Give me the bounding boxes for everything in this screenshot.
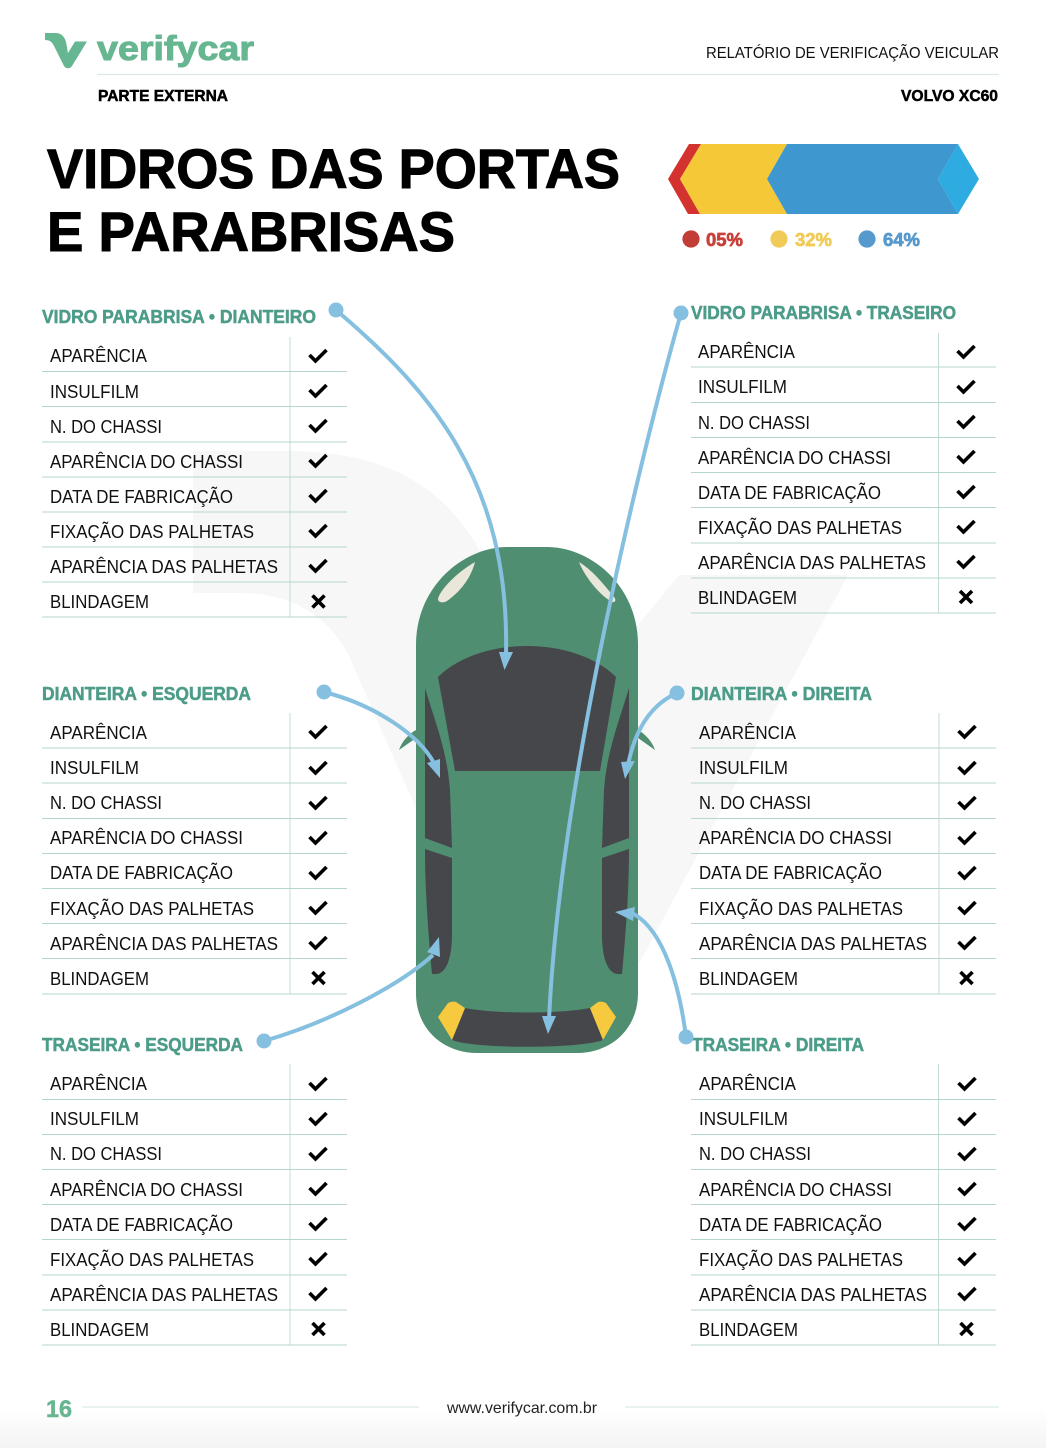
checklist rows: FIXAÇÃO DAS PALHETAS (699, 898, 903, 919)
checklist rows: N. DO CHASSI (50, 1144, 162, 1164)
logo wordmark: verifycar (97, 30, 254, 68)
checklist rows: N. DO CHASSI (699, 1144, 811, 1164)
arrow: windshield rear (542, 306, 688, 1034)
heading: DIANTEIRA • ESQUERDA (42, 684, 251, 704)
checklist rows: APARÊNCIA (50, 346, 147, 366)
heading: TRASEIRA • DIREITA (692, 1035, 864, 1055)
footer (46, 1396, 999, 1423)
checklist rows: N. DO CHASSI (50, 417, 162, 437)
checklist rows: APARÊNCIA DAS PALHETAS (50, 1285, 278, 1305)
title: VIDROS DAS PORTAS (47, 137, 620, 200)
arrow: rear left (256, 937, 440, 1048)
checklist rows: BLINDAGEM (699, 969, 798, 989)
header report label: RELATÓRIO DE VERIFICAÇÃO VEICULAR (706, 42, 999, 62)
panel: vidro parabrisa traseiro (691, 303, 996, 613)
checklist rows: INSULFILM (50, 382, 139, 402)
checklist rows: APARÊNCIA (699, 1074, 796, 1094)
checklist rows (42, 1064, 347, 1345)
checklist rows: BLINDAGEM (698, 588, 797, 608)
checklist rows: N. DO CHASSI (699, 793, 811, 813)
side windows (425, 688, 629, 974)
panel: dianteira direita (691, 684, 996, 994)
car illustration (399, 547, 655, 1053)
checklist rows (691, 1064, 996, 1345)
checklist rows: BLINDAGEM (50, 969, 149, 989)
arrow: windshield front (328, 302, 513, 670)
checklist rows: APARÊNCIA DO CHASSI (50, 452, 243, 472)
heading: VIDRO PARABRISA • DIANTEIRO (42, 307, 316, 327)
checklist rows: APARÊNCIA DAS PALHETAS (699, 934, 927, 954)
arrow: rear right (615, 907, 694, 1044)
website: www.verifycar.com.br (446, 1400, 598, 1417)
checklist rows: DATA DE FABRICAÇÃO (50, 486, 233, 507)
checklist rows: APARÊNCIA DO CHASSI (699, 828, 892, 848)
checklist rows: FIXAÇÃO DAS PALHETAS (50, 898, 254, 919)
checklist rows: FIXAÇÃO DAS PALHETAS (698, 517, 902, 538)
headlights (438, 562, 615, 602)
checklist rows: APARÊNCIA DAS PALHETAS (699, 1285, 927, 1305)
panel: dianteira esquerda (42, 684, 347, 994)
checklist rows: DATA DE FABRICAÇÃO (50, 1214, 233, 1235)
checklist rows: BLINDAGEM (699, 1320, 798, 1340)
section label: PARTE EXTERNA (98, 88, 228, 105)
rear window (452, 1008, 603, 1047)
title: E PARABRISAS (47, 200, 455, 263)
windshield (438, 646, 616, 771)
icon: verifycar V mark (45, 33, 87, 68)
checklist rows: APARÊNCIA DAS PALHETAS (50, 557, 278, 577)
checklist rows: INSULFILM (698, 377, 787, 397)
checklist rows: INSULFILM (699, 758, 788, 778)
bar legend: 32% (795, 230, 832, 250)
heading: VIDRO PARABRISA • TRASEIRO (691, 303, 956, 323)
car body (416, 547, 638, 1053)
checklist rows: DATA DE FABRICAÇÃO (699, 1214, 882, 1235)
checklist rows: BLINDAGEM (50, 592, 149, 612)
checklist rows: FIXAÇÃO DAS PALHETAS (50, 1249, 254, 1270)
checklist rows: INSULFILM (699, 1109, 788, 1129)
panel: vidro parabrisa dianteiro (42, 307, 347, 617)
stacked condition bar (668, 144, 979, 214)
heading: TRASEIRA • ESQUERDA (42, 1035, 243, 1055)
checklist rows: APARÊNCIA (698, 342, 795, 362)
checklist rows (691, 713, 996, 994)
checklist rows: BLINDAGEM (50, 1320, 149, 1340)
bar legend: 64% (883, 230, 920, 250)
page number: 16 (46, 1396, 72, 1423)
checklist rows: APARÊNCIA (699, 723, 796, 743)
arrow: front left (316, 684, 440, 778)
checklist rows: APARÊNCIA DAS PALHETAS (50, 934, 278, 954)
bar legend (682, 230, 920, 250)
arrow: front right (621, 686, 684, 779)
title (47, 137, 620, 263)
checklist rows: APARÊNCIA DO CHASSI (50, 1180, 243, 1200)
checklist rows: APARÊNCIA DO CHASSI (50, 828, 243, 848)
checklist rows: INSULFILM (50, 758, 139, 778)
checklist rows: APARÊNCIA DAS PALHETAS (698, 553, 926, 573)
checklist rows: FIXAÇÃO DAS PALHETAS (50, 521, 254, 542)
tail lights (438, 1002, 616, 1040)
checklist rows (42, 713, 347, 994)
checklist rows: INSULFILM (50, 1109, 139, 1129)
checklist rows: DATA DE FABRICAÇÃO (698, 482, 881, 503)
bar legend: 05% (706, 230, 743, 250)
checklist rows (42, 337, 347, 617)
checklist rows (691, 333, 996, 613)
heading: DIANTEIRA • DIREITA (691, 684, 872, 704)
checklist rows: N. DO CHASSI (698, 413, 810, 433)
checklist rows: APARÊNCIA (50, 1074, 147, 1094)
checklist rows: APARÊNCIA DO CHASSI (699, 1180, 892, 1200)
panel: traseira direita (691, 1035, 996, 1345)
logo (45, 30, 254, 68)
panel: traseira esquerda (42, 1035, 347, 1345)
side mirrors (399, 730, 655, 750)
vehicle model: VOLVO XC60 (901, 88, 998, 105)
checklist rows: DATA DE FABRICAÇÃO (699, 862, 882, 883)
background watermark V (193, 451, 848, 1040)
checklist rows: APARÊNCIA (50, 723, 147, 743)
checklist rows: APARÊNCIA DO CHASSI (698, 448, 891, 468)
checklist rows: FIXAÇÃO DAS PALHETAS (699, 1249, 903, 1270)
checklist rows: DATA DE FABRICAÇÃO (50, 862, 233, 883)
checklist rows: N. DO CHASSI (50, 793, 162, 813)
